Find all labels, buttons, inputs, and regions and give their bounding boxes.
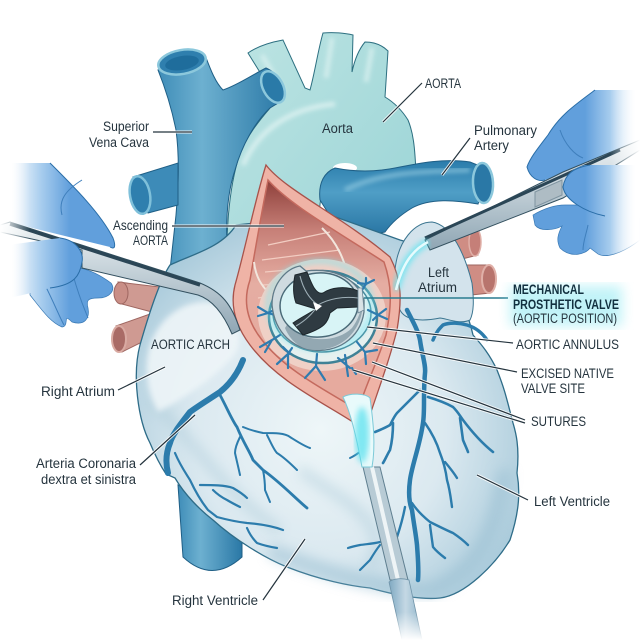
label: Left Atrium: Atrium <box>418 280 457 295</box>
label: Left Atrium <box>418 265 457 295</box>
label: Superior Vena Cava: Superior <box>103 119 149 134</box>
mechanical valve <box>272 266 364 350</box>
label: Right Ventricle: Right Ventricle <box>172 593 258 608</box>
label: Arteria Coronaria <box>36 456 136 487</box>
label: Pulmonary Artery <box>474 123 537 153</box>
label: Pulmonary Artery: Artery <box>474 138 509 153</box>
pulmonary artery <box>320 161 494 240</box>
instrument: lower cannula <box>343 394 430 640</box>
label: Ascending AORTA <box>113 218 168 248</box>
vessels: red right branches <box>437 228 496 296</box>
aortic arch lobe <box>147 302 239 412</box>
hand: right glove back <box>527 90 640 256</box>
label: EXCISED NATIVE VALVE SITE: VALVE SITE <box>521 381 585 396</box>
label: Ascending AORTA: Ascending <box>113 218 168 233</box>
label: mechanical prosthetic valve: MECHANICAL <box>513 282 584 297</box>
label: Superior Vena Cava <box>89 119 149 150</box>
label: mechanical prosthetic valve: (AORTIC POSITION) <box>513 311 617 326</box>
leader line halos <box>118 90 528 600</box>
vessel: superior vena cava <box>156 46 290 280</box>
label: AORTA: AORTA <box>425 76 461 91</box>
label: mechanical prosthetic valve <box>513 282 619 326</box>
label: Aorta centre: Aorta <box>322 121 353 136</box>
hand: right glove thumb <box>563 165 640 218</box>
incision <box>233 165 400 430</box>
leader lines <box>118 83 528 600</box>
label: SUTURES: SUTURES <box>531 414 586 429</box>
hand: left glove back fingers <box>5 163 115 327</box>
instrument: right forceps <box>396 140 640 290</box>
instrument: left forceps <box>0 222 240 334</box>
vessels: red left branches <box>112 282 160 352</box>
label: Arteria Coronaria: Arteria Coronaria <box>36 456 136 471</box>
vessel: lower vena cava <box>178 485 242 570</box>
hand: left glove thumb <box>8 238 82 298</box>
label glow <box>510 286 622 326</box>
label: EXCISED NATIVE VALVE SITE <box>521 366 614 396</box>
label: Superior Vena Cava: Vena Cava <box>89 135 149 150</box>
coronary vessels <box>166 310 493 580</box>
heart body <box>136 215 519 598</box>
label: Left Ventricle: Left Ventricle <box>534 494 610 509</box>
label: Pulmonary Artery: Pulmonary <box>474 123 537 138</box>
left atrium lobe <box>395 222 473 322</box>
label: EXCISED NATIVE VALVE SITE: EXCISED NATIVE <box>521 366 614 381</box>
label: Arteria Coronaria: dextra et sinistra <box>41 472 136 487</box>
label: Ascending AORTA: AORTA <box>133 233 168 248</box>
label: AORTIC ANNULUS: AORTIC ANNULUS <box>516 337 619 352</box>
glove edge fade <box>0 150 30 320</box>
vessel: left side branch <box>127 163 178 215</box>
label: Right Atrium: Right Atrium <box>41 384 115 399</box>
icon: sutures <box>258 278 387 380</box>
label: AORTIC ARCH: AORTIC ARCH <box>151 337 230 352</box>
valve glow and sewing ring <box>258 259 386 371</box>
aorta <box>227 33 416 280</box>
label: Left Atrium: Left <box>428 265 449 280</box>
